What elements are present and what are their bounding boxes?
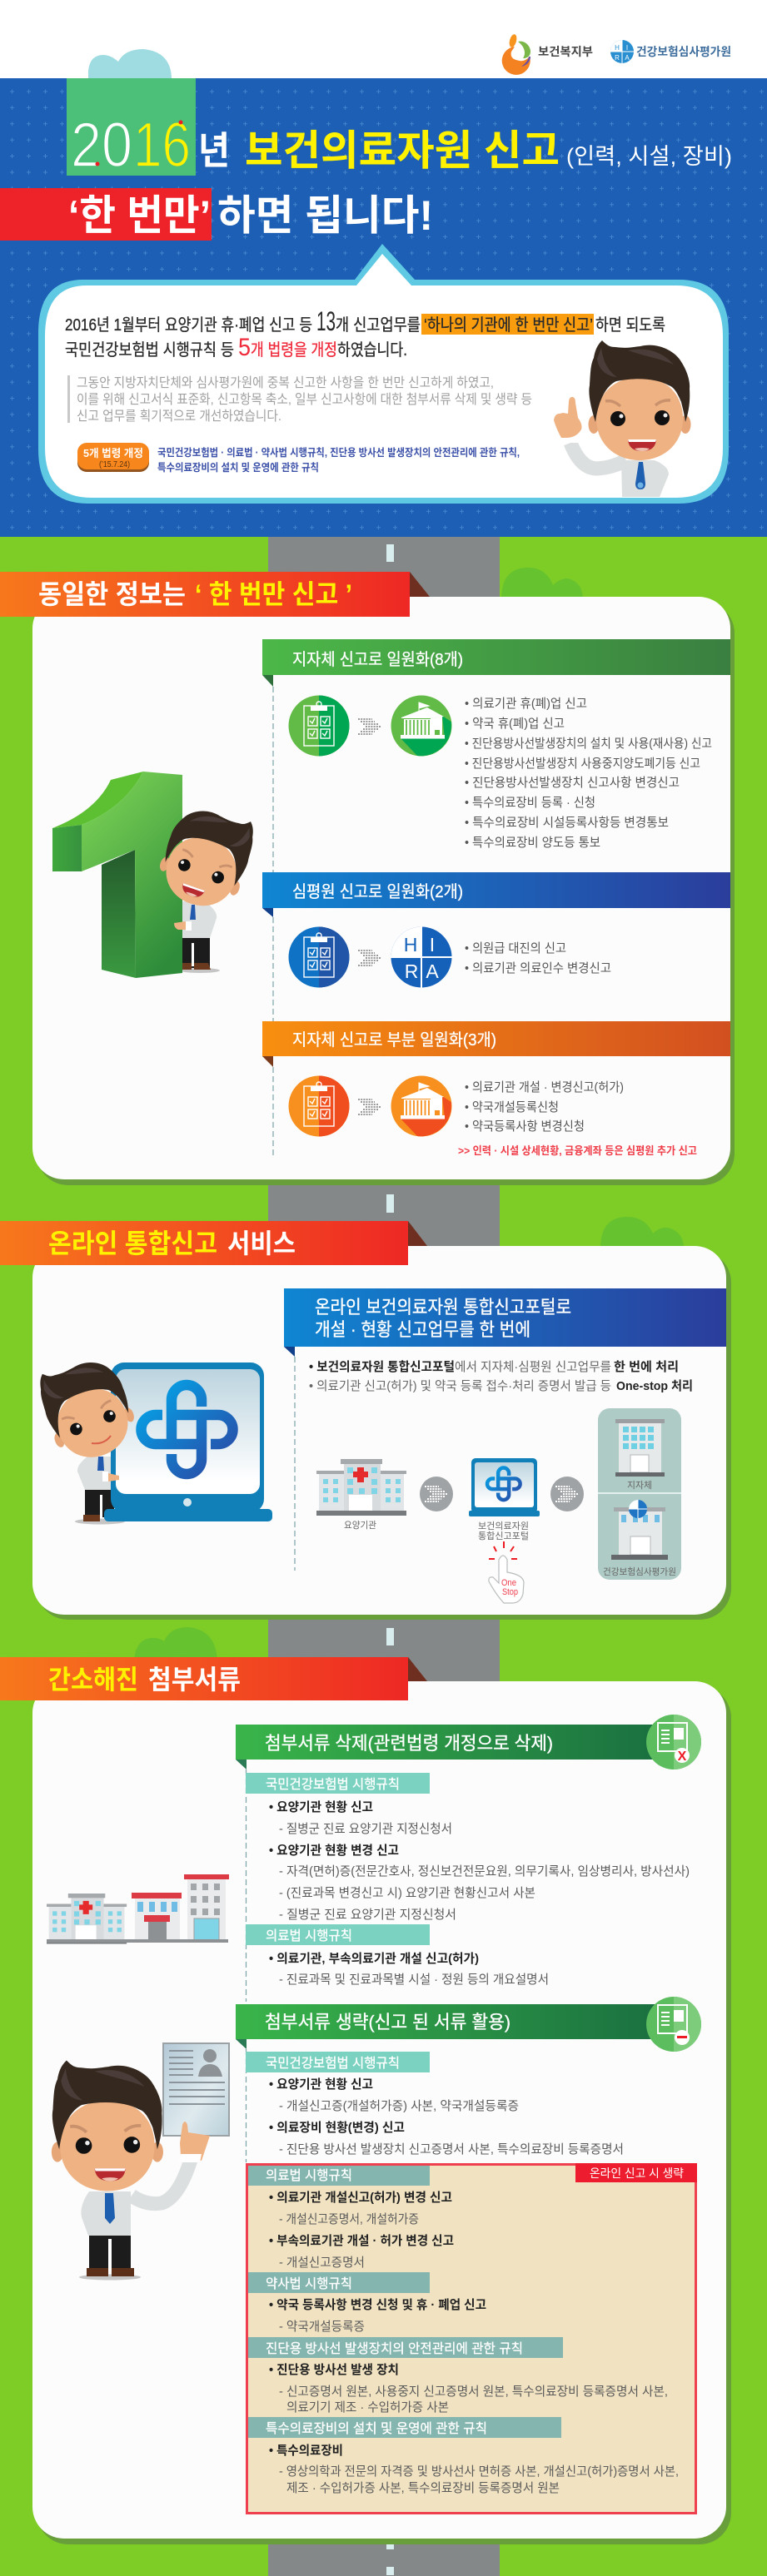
logo: HIRA	[610, 40, 731, 63]
list: HIRA reports: • 의료기관 의료인수 변경신고	[465, 961, 611, 975]
arrow circle 2	[550, 1477, 584, 1511]
icon: HIRA circle: R	[405, 960, 418, 982]
medical list: - 개설신고증명서	[279, 2256, 365, 2270]
list: HIRA reports	[465, 941, 611, 975]
list: local government reports	[465, 697, 712, 850]
blue bar: portal: 온라인 보건의료자원 통합신고포털로	[315, 1297, 571, 1318]
label: portal	[478, 1521, 529, 1541]
list: local government reports: • 약국 휴(폐)업 신고	[465, 717, 565, 731]
list: local government reports: • 특수의료장비 시설등록사항등 변경통보	[465, 816, 669, 830]
deleted documents list: - 질병군 진료 요양기관 지정신청서	[279, 1908, 456, 1922]
orange badge: (’15.7.24)	[99, 460, 130, 469]
tag: omitted when online	[575, 2163, 697, 2182]
intro text continued: 개 신고업무를	[336, 315, 421, 335]
list of five regulations: 특수의료장비의 설치 및 운영에 관한 규칙	[157, 461, 319, 474]
medical list: - 개설신고증명서, 개설허가증	[279, 2212, 419, 2226]
portal logo	[142, 1385, 233, 1474]
icon: document with red X	[646, 1715, 701, 1769]
label: HIRA: 건강보험심사평가원	[603, 1566, 676, 1577]
portal bullet 1: 한 번에 처리	[614, 1360, 679, 1374]
online omission box	[247, 2163, 697, 2514]
bar: documents omitted	[236, 2004, 660, 2049]
blue bar: HIRA: 심평원 신고로 일원화(2개)	[292, 882, 463, 901]
heading white: 서비스	[227, 1228, 296, 1258]
deleted documents list 2: • 의료기관, 부속의료기관 개설 신고(허가)	[269, 1952, 479, 1966]
radiation list: • 진단용 방사선 발생 장치	[269, 2363, 399, 2377]
label: care institution: 요양기관	[344, 1520, 376, 1531]
list: partial integration reports	[465, 1080, 624, 1134]
title line 2 with red band	[0, 188, 433, 241]
intro text end of line 1: 하면 되도록	[595, 315, 665, 335]
label: NHI rules: 국민건강보험법 시행규칙	[266, 1777, 400, 1792]
title parenthetical: (인력, 시설, 장비)	[566, 144, 732, 169]
red emphasis: 개 법령을 개정	[251, 340, 337, 360]
section 1 card	[32, 597, 735, 1185]
man behind number one: body	[180, 901, 220, 973]
cloud	[88, 49, 172, 78]
label: Medical Service Act rules: 의료법 시행규칙	[266, 2168, 352, 2183]
orange bar: partial integration	[262, 1021, 730, 1067]
list of five regulations	[157, 446, 520, 474]
radiation list	[269, 2363, 668, 2415]
icon: document with red minus	[646, 1997, 701, 2052]
blue bar: HIRA	[262, 872, 730, 917]
icon: HIRA circle: A	[426, 960, 439, 982]
bush 3	[134, 1627, 217, 1660]
arrow dots	[358, 719, 381, 734]
title line 2 with red band: ‘한 번만’	[68, 192, 211, 239]
tag: omitted when online: 온라인 신고 시 생략	[590, 2167, 684, 2180]
arrow dots	[358, 1099, 381, 1114]
icon: HIRA circle	[391, 927, 451, 987]
blue bar: portal	[284, 1288, 726, 1357]
portal bullet 1: • 보건의료자원 통합신고포털	[309, 1360, 455, 1374]
large number 13: 13	[316, 306, 336, 336]
blue bar: portal: 개설 · 현황 신고업무를 한 번에	[315, 1319, 530, 1340]
label: radiation rules: 진단용 방사선 발생장치의 안전관리에 관한 규칙	[266, 2341, 523, 2356]
intro text line 2: 국민건강보험법 시행규칙 등	[65, 340, 234, 360]
icon: One Stop hand: One	[501, 1578, 516, 1588]
portal bullet 2: • 의료기관 신고(허가) 및 약국 등록 접수·처리 증명서 발급 등	[309, 1379, 611, 1393]
label: Medical Service Act rules	[246, 1924, 430, 1945]
pharmacy list	[269, 2298, 486, 2334]
big green number one	[52, 772, 182, 978]
deleted documents list: - (진료과목 변경신고 시) 요양기관 현황신고서 사본	[279, 1886, 535, 1900]
tall building	[184, 1874, 229, 1941]
heading yellow: 간소해진	[48, 1665, 138, 1695]
deleted documents list: • 요양기관 현황 신고	[269, 1800, 373, 1814]
gray explanatory text	[67, 375, 532, 424]
bar: documents omitted: 첨부서류 생략(신고 된 서류 활용)	[265, 2012, 511, 2033]
deleted documents list: - 자격(면허)증(전문간호사, 정신보건전문요원, 의무기록사, 임상병리사, 방사선사)	[279, 1864, 690, 1879]
medical list: • 의료기관 개설신고(허가) 변경 신고	[269, 2191, 452, 2205]
section 3 card	[32, 1681, 731, 2544]
section 2 ribbon	[0, 1221, 427, 1265]
orange bar: partial integration: 지자체 신고로 부분 일원화(3개)	[292, 1030, 496, 1050]
section 1 ribbon	[0, 572, 430, 617]
list: local government reports: • 특수의료장비 등록 · 신청	[465, 796, 595, 810]
medical list	[269, 2191, 454, 2270]
orange badge: 5개 법령 개정	[83, 447, 143, 459]
title: year block	[67, 78, 196, 181]
list: local government reports: • 진단용방사선발생장치의 설치 및 사용(재사용) 신고	[465, 737, 712, 751]
special equipment list: 제조 · 수입허가증 사본, 특수의료장비 등록증명서 원본	[286, 2481, 560, 2495]
heading yellow: ‘ 한 번만 신고 ’	[195, 579, 352, 609]
pharmacy list: - 약국개설등록증	[279, 2320, 365, 2334]
list: local government reports: • 진단용방사선발생장치 신고사항 변경신고	[465, 776, 680, 790]
label: portal: 통합신고포털	[478, 1531, 529, 1541]
logo: HIRA: H	[615, 44, 620, 52]
special equipment list: • 특수의료장비	[269, 2444, 343, 2458]
icon: small laptop	[469, 1458, 540, 1516]
list: local government reports: • 특수의료장비 양도등 통보	[465, 836, 600, 850]
portal bullet 2: One-stop 처리	[616, 1379, 693, 1393]
icon: HIRA building	[611, 1500, 668, 1560]
label: NHI rules 2	[246, 2052, 430, 2072]
omitted documents list: - 진단용 방사선 발생장치 신고증명서 사본, 특수의료장비 등록증명서	[279, 2142, 624, 2157]
logo text: MOHW: 보건복지부	[538, 45, 593, 58]
deleted documents list 2	[269, 1952, 549, 1987]
pharmacy list: • 약국 등록사항 변경 신청 및 휴 · 폐업 신고	[269, 2298, 486, 2312]
medical list: • 부속의료기관 개설 · 허가 변경 신고	[269, 2234, 454, 2248]
label: portal: 보건의료자원	[478, 1521, 529, 1531]
green bar: local government: 지자체 신고로 일원화(8개)	[292, 650, 463, 669]
icon: HIRA circle: H	[404, 934, 417, 955]
deleted documents list	[269, 1800, 690, 1922]
label: special equipment rules	[248, 2417, 561, 2438]
logo text: HIRA: 건강보험심사평가원	[636, 45, 731, 58]
radiation list: - 신고증명서 원본, 사용중지 신고증명서 원본, 특수의료장비 등록증명서 사본,	[279, 2385, 668, 2399]
gray explanatory text: 이를 위해 신고서식 표준화, 신고항목 축소, 일부 신고사항에 대한 첨부서류 삭제 및 생략 등	[77, 392, 532, 407]
red note: >> 인력 · 시설 상세현황, 금융계좌 등은 심평원 추가 신고	[458, 1144, 697, 1157]
section 3 ribbon	[0, 1657, 427, 1700]
omitted documents list	[269, 2077, 624, 2157]
list of five regulations: 국민건강보험법 · 의료법 · 약사법 시행규칙, 진단용 방사선 발생장치의 안전관리에 관한 규칙,	[157, 446, 520, 459]
intro text line 1: 2016년 1월부터 요양기관 휴·폐업 신고 등	[65, 315, 312, 335]
arrow circle 1	[420, 1477, 453, 1511]
heading white: 동일한 정보는	[38, 579, 186, 609]
label: special equipment rules: 특수의료장비의 설치 및 운영에 관한 규칙	[266, 2421, 487, 2436]
icon: document with red X: X	[678, 1750, 687, 1764]
label: NHI rules	[246, 1773, 430, 1794]
deleted documents list: - 질병군 진료 요양기관 지정신청서	[279, 1822, 452, 1836]
green bar: local government	[262, 639, 730, 687]
list: local government reports: • 진단용방사선발생장치 사용중지양도폐기등 신고	[465, 757, 700, 771]
special equipment list: - 영상의학과 전문의 자격증 및 방사선사 면허증 사본, 개설신고(허가)증명서 사본,	[279, 2464, 679, 2479]
gray explanatory text: 그동안 지방자치단체와 심사평가원에 중복 신고한 사항을 한 번만 신고하게 하였고,	[77, 375, 494, 390]
man beside laptop: head and hand	[32, 1349, 143, 1482]
label: Pharmaceutical Affairs rules	[248, 2272, 430, 2293]
bush 2	[600, 1217, 684, 1248]
icon: blue clipboard	[288, 927, 350, 987]
title line 1	[198, 127, 732, 174]
section 2 card	[32, 1246, 731, 1620]
title main yellow: 보건의료자원 신고	[245, 127, 560, 174]
icon: One Stop hand	[489, 1541, 524, 1603]
list: partial integration reports: • 의료기관 개설 · 변경신고(허가)	[465, 1080, 624, 1094]
deleted documents list: • 요양기관 현황 변경 신고	[269, 1844, 399, 1858]
blue header panel	[0, 78, 767, 537]
man behind number one: head and hand	[151, 798, 261, 931]
omitted documents list: • 요양기관 현황 신고	[269, 2077, 373, 2092]
icon: green government building	[391, 696, 451, 756]
label: Pharmaceutical Affairs rules: 약사법 시행규칙	[266, 2276, 352, 2291]
icon: One Stop hand: Stop	[502, 1587, 518, 1597]
logo: HIRA: R	[615, 54, 620, 62]
label: Medical Service Act rules: 의료법 시행규칙	[266, 1928, 352, 1943]
document	[163, 2043, 229, 2136]
icon: orange clipboard	[288, 1075, 350, 1137]
green lawn	[0, 537, 767, 2576]
big laptop with logo	[104, 1362, 272, 1521]
list: partial integration reports: • 약국등록사항 변경신청	[465, 1119, 585, 1134]
heading yellow: 온라인 통합신고	[48, 1228, 217, 1258]
man beside laptop: body	[75, 1457, 125, 1525]
gray explanatory text: 신고 업무를 획기적으로 개선하였습니다.	[77, 409, 281, 424]
heading white: 첨부서류	[148, 1665, 241, 1695]
portal bullet 1: 에서 지자체·심평원 신고업무를	[455, 1360, 611, 1374]
year digits yellow: 16	[133, 110, 191, 181]
label: NHI rules 2: 국민건강보험법 시행규칙	[266, 2056, 400, 2071]
logo: HIRA: I	[626, 44, 628, 52]
list: local government reports: • 의료기관 휴(폐)업 신고	[465, 697, 587, 711]
special equipment list	[269, 2444, 679, 2495]
red number 5: 5	[238, 334, 251, 361]
label: Medical Service Act rules	[248, 2166, 430, 2186]
icon: hospital group	[47, 1874, 229, 1944]
icon: green clipboard	[288, 696, 350, 756]
omitted documents list: • 의료장비 현황(변경) 신고	[269, 2121, 405, 2135]
bar: documents deleted: 첨부서류 삭제(관련법령 개정으로 삭제)	[265, 1733, 553, 1754]
label: radiation rules	[248, 2337, 563, 2358]
character: man holding document	[52, 2043, 229, 2281]
orange badge	[77, 443, 149, 472]
year digits white: 20	[71, 110, 132, 181]
radiation list: 의료기기 제조 · 수입허가증 사본	[286, 2400, 449, 2415]
bar: documents deleted	[236, 1725, 660, 1769]
destination panel	[598, 1408, 681, 1580]
deleted documents list 2: - 진료과목 및 진료과목별 시설 · 정원 등의 개요설명서	[279, 1973, 549, 1987]
middle building	[132, 1893, 182, 1941]
orange highlight: ‘하나의 기관에 한 번만 신고’	[424, 315, 593, 335]
icon: local government building	[615, 1419, 665, 1477]
list: HIRA reports: • 의원급 대진의 신고	[465, 941, 566, 955]
road	[268, 537, 500, 2576]
intro text end of line 2: 하였습니다.	[337, 340, 407, 360]
list: partial integration reports: • 약국개설등록신청	[465, 1100, 559, 1114]
portal bullet 1	[309, 1360, 679, 1374]
logo: HIRA: A	[625, 54, 630, 62]
title line 2 rest: 하면 됩니다!	[217, 192, 433, 239]
bush 1	[501, 568, 583, 599]
icon: hospital	[316, 1459, 406, 1516]
omitted documents list: - 개설신고증(개설허가증) 사본, 약국개설등록증	[279, 2099, 519, 2113]
icon: orange government building	[391, 1075, 451, 1137]
logo: Ministry of Health and Welfare	[502, 33, 593, 75]
speech bubble	[38, 244, 729, 504]
character: pointing man	[554, 340, 691, 497]
icon: HIRA circle: I	[430, 934, 435, 955]
label: local government: 지자체	[627, 1480, 652, 1491]
title line 1: 년	[198, 129, 230, 172]
arrow dots	[358, 950, 381, 965]
